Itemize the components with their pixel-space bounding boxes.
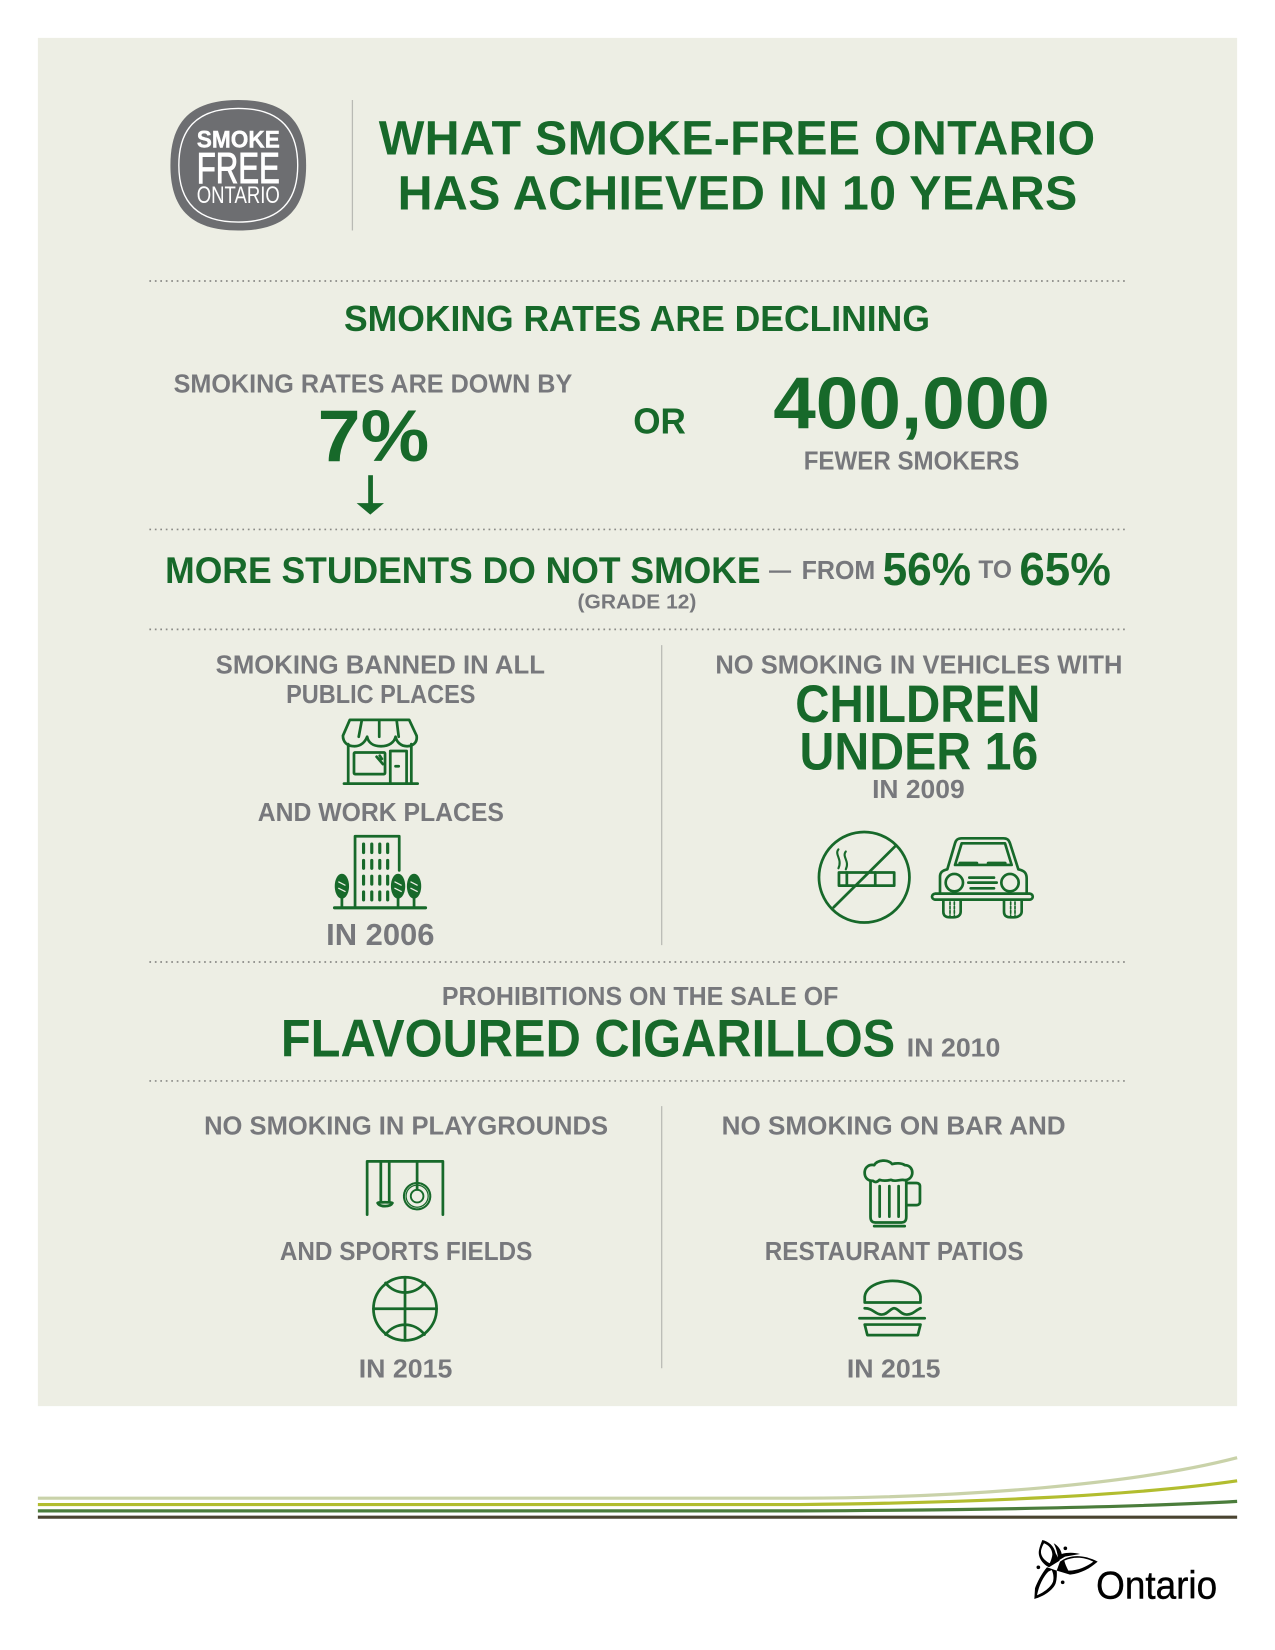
panel: vehicles xyxy=(715,650,1122,923)
text: and work places: AND WORK PLACES xyxy=(258,797,504,827)
icon: no smoking xyxy=(819,832,909,923)
text: in 2015: IN 2015 xyxy=(359,1354,452,1384)
logo: Ontario xyxy=(1034,1540,1217,1608)
icon: car xyxy=(932,838,1033,917)
text: in 2006: IN 2006 xyxy=(326,918,434,952)
heading: children under 16: CHILDREN xyxy=(795,675,1040,734)
text: banned in public places xyxy=(216,650,545,709)
text: down by: SMOKING RATES ARE DOWN BY xyxy=(174,369,573,399)
title xyxy=(379,112,1095,220)
text: Ontario wordmark: Ontario xyxy=(1096,1565,1217,1608)
icon: beer mug xyxy=(865,1161,920,1226)
icon: down arrow xyxy=(357,475,384,515)
text: banned in public places: SMOKING BANNED IN ALL xyxy=(216,650,545,680)
title: WHAT SMOKE-FREE ONTARIO xyxy=(379,112,1095,166)
icon: office building xyxy=(335,836,426,908)
heading: smoking rates: SMOKING RATES ARE DECLINING xyxy=(344,299,930,339)
icon: storefront xyxy=(343,720,418,784)
icon: swing set xyxy=(367,1161,443,1215)
panel: playgrounds and sports fields xyxy=(204,1111,608,1384)
heading: flavoured cigarillos: FLAVOURED CIGARILLOS xyxy=(281,1010,895,1069)
text: prohibitions: PROHIBITIONS ON THE SALE OF xyxy=(442,981,838,1011)
text: in 2015: IN 2015 xyxy=(847,1354,940,1384)
icon: basketball xyxy=(373,1277,437,1340)
stat: 65 percent: 65% xyxy=(1019,543,1111,595)
heading: more students: MORE STUDENTS DO NOT SMOKE xyxy=(165,550,761,591)
heading: children under 16 xyxy=(795,675,1040,781)
text: banned in public places: PUBLIC PLACES xyxy=(286,679,475,709)
panel: smoking rates are declining xyxy=(174,299,1050,515)
text: no smoking in vehicles: NO SMOKING IN VEHICLES WITH xyxy=(715,650,1122,680)
panel: students xyxy=(165,543,1111,613)
title: HAS ACHIEVED IN 10 YEARS xyxy=(398,166,1077,220)
decorative swoosh lines xyxy=(38,1458,1237,1517)
panel: background xyxy=(38,38,1237,1406)
stat: 56 percent: 56% xyxy=(883,543,971,595)
text: from: FROM xyxy=(802,555,875,585)
logo: Smoke Free Ontario badge xyxy=(170,100,306,230)
text: grade 12: (GRADE 12) xyxy=(578,591,696,613)
panel: flavoured cigarillos xyxy=(281,981,1000,1069)
text: in 2010: IN 2010 xyxy=(907,1033,1000,1063)
text: and sports fields: AND SPORTS FIELDS xyxy=(280,1236,532,1266)
text: restaurant patios: RESTAURANT PATIOS xyxy=(765,1236,1024,1266)
text: in 2009: IN 2009 xyxy=(872,774,965,804)
text: no smoking in playgrounds: NO SMOKING IN PLAYGROUNDS xyxy=(204,1111,608,1141)
logo: Smoke Free Ontario badge: FREE xyxy=(197,145,280,193)
heading: children under 16: UNDER 16 xyxy=(800,722,1038,781)
text: to: TO xyxy=(978,556,1012,584)
text: or: OR xyxy=(633,402,686,442)
logo: Smoke Free Ontario badge: SMOKE xyxy=(197,126,280,153)
text: fewer smokers: FEWER SMOKERS xyxy=(804,445,1019,475)
icon: trillium xyxy=(1034,1540,1098,1599)
stat: 7 percent: 7% xyxy=(318,394,429,477)
icon: burger xyxy=(859,1281,925,1335)
text: no smoking on bar and: NO SMOKING ON BAR AND xyxy=(722,1111,1066,1141)
stat: 400,000: 400,000 xyxy=(773,361,1050,444)
panel: bar and restaurant patios xyxy=(722,1111,1066,1384)
panel: public places xyxy=(216,650,545,952)
logo: Smoke Free Ontario badge: ONTARIO xyxy=(197,182,280,209)
